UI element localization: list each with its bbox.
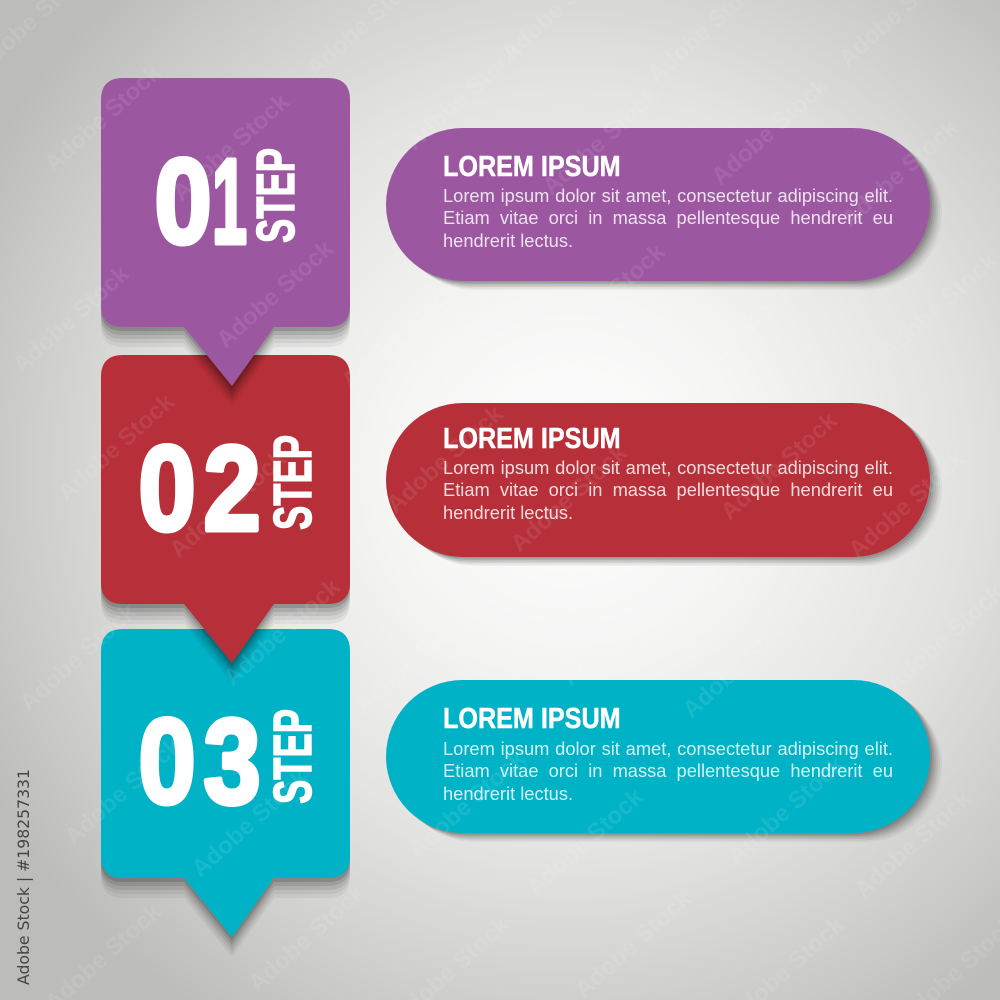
step 3 number: 03: [139, 693, 261, 829]
panel: step 3 description: [386, 680, 930, 833]
step 1 number: 1: [212, 135, 247, 269]
step 1 stacked shadow: [101, 82, 350, 406]
step 3 heading: LOREM IPSUM: [443, 703, 621, 735]
step 3 text block: Etiam vitae orci in massa pellentesque hendrerit eu: [443, 760, 893, 781]
step 2 text block: Lorem ipsum dolor sit amet, consectetur adipiscing elit.: [443, 457, 893, 478]
stock watermark overlay: Adobe Stock: [715, 407, 843, 526]
stock watermark overlay: Adobe Stock: [164, 445, 292, 564]
step 2 text block: [443, 457, 893, 523]
stock watermark overlay: Adobe Stock: [537, 82, 665, 201]
stock watermark overlay: Adobe Stock: [403, 745, 531, 864]
stock image ID: Adobe Stock | #198257331: [14, 769, 33, 985]
stock watermark overlay: Adobe Stock: [677, 605, 805, 724]
stock watermark overlay: Adobe Stock: [543, 238, 671, 357]
step 2 marker: [101, 355, 350, 683]
step 2 text block: hendrerit lectus.: [443, 502, 573, 523]
step 1 heading: LOREM IPSUM: [443, 151, 621, 183]
stock watermark overlay: Adobe Stock: [186, 764, 314, 883]
stock watermark overlay: Adobe Stock: [167, 88, 295, 207]
stock watermark overlay: Adobe Stock: [875, 247, 1000, 366]
step 2 heading: LOREM IPSUM: [443, 423, 621, 455]
step 1 label: STEP: [246, 148, 306, 243]
step 3 text block: Lorem ipsum dolor sit amet, consectetur adipiscing elit.: [443, 738, 893, 759]
stock watermark overlay: Adobe Stock: [706, 72, 834, 191]
stock watermark overlay: Adobe Stock: [336, 276, 464, 395]
stock watermark overlay: Adobe Stock: [722, 751, 850, 870]
step 2 text block: Etiam vitae orci in massa pellentesque hendrerit eu: [443, 479, 893, 500]
step 3 marker: [101, 629, 350, 957]
stock watermark overlay: Adobe Stock: [14, 598, 142, 717]
step 1 callout shape: [101, 78, 350, 386]
stock watermark overlay: Adobe Stock: [52, 388, 180, 507]
stock watermark overlay: Adobe Stock: [505, 439, 633, 558]
step 2 number: 02: [139, 420, 261, 556]
step 2 label: STEP: [263, 435, 323, 530]
step 1 marker: [101, 78, 350, 406]
stock watermark overlay: Adobe Stock: [569, 885, 697, 1000]
stock watermark overlay: Adobe Stock: [243, 879, 371, 998]
stock watermark overlay: Adobe Stock: [211, 235, 339, 354]
step 2 stacked shadow: [101, 359, 350, 683]
stock watermark overlay: Adobe Stock: [556, 573, 684, 692]
stock watermark overlay: Adobe Stock: [39, 59, 167, 178]
step 3 label: STEP: [263, 709, 323, 804]
stock watermark overlay: Adobe Stock: [7, 260, 135, 379]
stock watermark overlay: Adobe Stock: [671, 279, 799, 398]
panel: step 2 description: [386, 403, 930, 557]
stock watermark overlay: Adobe Stock: [521, 783, 649, 902]
step 1 number: [154, 133, 247, 269]
stock watermark overlay: Adobe Stock: [381, 400, 509, 519]
stock watermark overlay: Adobe Stock: [218, 573, 346, 692]
stock watermark overlay: Adobe Stock: [836, 114, 964, 233]
stock watermark overlay: Adobe Stock: [400, 37, 528, 156]
step 3 text block: [443, 738, 893, 804]
step 1 number: 0: [154, 133, 212, 269]
stock watermark overlay: Adobe Stock: [59, 732, 187, 851]
step 3 text block: hendrerit lectus.: [443, 783, 573, 804]
step 1 text block: [443, 185, 893, 251]
step 3 callout shape: [101, 629, 350, 937]
stock watermark overlay: Adobe Stock: [349, 601, 477, 720]
step 2 callout shape: [101, 355, 350, 663]
step 1 text block: hendrerit lectus.: [443, 230, 573, 251]
stock watermark overlay: Adobe Stock: [843, 445, 971, 564]
step 1 text block: Etiam vitae orci in massa pellentesque hendrerit eu: [443, 207, 893, 228]
panel: step 1 description: [386, 128, 930, 281]
step 1 text block: Lorem ipsum dolor sit amet, consectetur adipiscing elit.: [443, 185, 893, 206]
stock watermark overlay: Adobe Stock: [849, 785, 977, 904]
step 3 stacked shadow: [101, 633, 350, 957]
